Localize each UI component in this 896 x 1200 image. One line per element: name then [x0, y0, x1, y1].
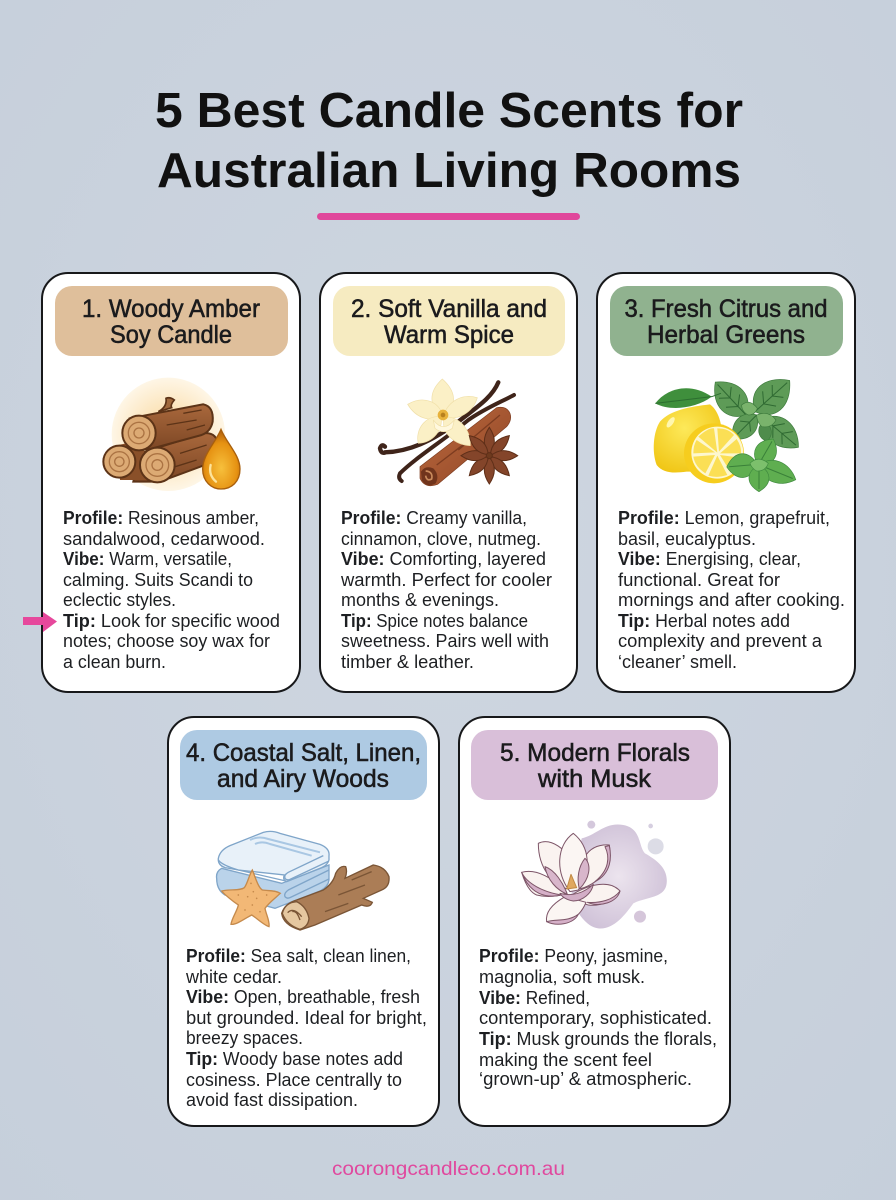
arrow: pointing at tip — [23, 612, 57, 632]
text: card 3 details: Vibe: Energising, clear, — [618, 548, 801, 569]
text: card 5 details: contemporary, sophisticated. — [479, 1007, 712, 1028]
text: card 2 details: Tip: Spice notes balance — [341, 610, 528, 631]
text: card 1 details: Tip: Look for specific wood — [63, 610, 280, 631]
heading: card 2: 2. Soft Vanilla and — [351, 295, 547, 323]
text: card 1 details: eclectic styles. — [63, 589, 176, 610]
heading: card 4: and Airy Woods — [217, 765, 389, 793]
text: card 4 details: Tip: Woody base notes add — [186, 1048, 403, 1069]
title — [155, 84, 743, 198]
text: card 4 details: cosiness. Place centrally to — [186, 1069, 402, 1090]
icon: vanilla, cinnamon and star anise — [380, 379, 518, 486]
text: card 2 details: warmth. Perfect for cooler — [340, 569, 552, 590]
text: card 5 details: Tip: Musk grounds the florals, — [479, 1028, 717, 1049]
heading: card 3: Herbal Greens — [647, 321, 805, 349]
text: card 2 details: sweetness. Pairs well with — [341, 630, 549, 651]
text: card 2 details: Profile: Creamy vanilla, — [341, 507, 527, 528]
heading: card 2: Warm Spice — [384, 321, 514, 349]
text: card 5 details: Vibe: Refined, — [479, 987, 590, 1008]
text: card 2 details: timber & leather. — [341, 651, 474, 672]
icon: logs and amber drop — [103, 378, 240, 491]
text: card 4 details: avoid fast dissipation. — [186, 1089, 358, 1110]
panel: woody amber soy candle — [42, 273, 300, 692]
icon: lemon and herbs — [654, 369, 807, 492]
heading: card 1: Soy Candle — [110, 321, 232, 349]
heading: card 5: with Musk — [537, 765, 652, 793]
text: card 3 details: Tip: Herbal notes add — [618, 610, 790, 631]
heading: card 3 — [610, 286, 843, 356]
text: card 1 details: calming. Suits Scandi to — [63, 569, 253, 590]
text: card 5 details: making the scent feel — [479, 1049, 652, 1070]
text: card 1 details: a clean burn. — [63, 651, 166, 672]
heading: card 4 — [180, 730, 427, 800]
text: card 2 details: Vibe: Comforting, layered — [341, 548, 546, 569]
panel: coastal salt, linen, and airy woods — [168, 717, 439, 1126]
footer: website: coorongcandleco.com.au — [332, 1158, 565, 1180]
text: card 3 details: functional. Great for — [618, 569, 780, 590]
text: card 5 details: magnolia, soft musk. — [479, 966, 645, 987]
title: Australian Living Rooms — [157, 144, 741, 198]
heading: card 5: 5. Modern Florals — [500, 739, 690, 767]
text: card 3 details — [618, 507, 845, 672]
text: card 4 details: but grounded. Ideal for bright, — [186, 1007, 427, 1028]
text: card 2 details: months & evenings. — [341, 589, 499, 610]
text: card 1 details: sandalwood, cedarwood. — [63, 528, 265, 549]
text: card 3 details: Profile: Lemon, grapefruit, — [618, 507, 830, 528]
text: card 1 details: Profile: Resinous amber, — [63, 507, 259, 528]
text: card 2 details: cinnamon, clove, nutmeg. — [341, 528, 541, 549]
panel: fresh citrus and herbal greens — [597, 273, 855, 692]
text: card 1 details — [63, 507, 280, 672]
icon: magnolia and musk cloud — [522, 821, 667, 928]
text: card 4 details: Vibe: Open, breathable, fresh — [186, 986, 420, 1007]
title underline — [317, 213, 580, 220]
text: card 5 details: ‘grown-up’ & atmospheric. — [479, 1068, 692, 1089]
text: card 4 details — [185, 945, 427, 1110]
heading: card 4: 4. Coastal Salt, Linen, — [186, 739, 421, 767]
text: card 1 details: Vibe: Warm, versatile, — [63, 548, 232, 569]
heading: card 1 — [55, 286, 288, 356]
heading: card 3: 3. Fresh Citrus and — [624, 295, 828, 323]
text: card 4 details: breezy spaces. — [186, 1027, 303, 1048]
heading: card 5 — [471, 730, 718, 800]
text: card 1 details: notes; choose soy wax for — [63, 630, 270, 651]
heading: card 2 — [333, 286, 565, 356]
text: card 2 details — [340, 507, 552, 672]
text: card 3 details: basil, eucalyptus. — [618, 528, 756, 549]
heading: card 1: 1. Woody Amber — [82, 295, 260, 323]
text: card 3 details: mornings and after cooking. — [618, 589, 845, 610]
text: card 5 details — [479, 945, 717, 1089]
text: card 3 details: ‘cleaner’ smell. — [618, 651, 737, 672]
panel: soft vanilla and warm spice — [320, 273, 577, 692]
text: card 5 details: Profile: Peony, jasmine, — [479, 945, 668, 966]
icon: towels, starfish and driftwood — [217, 831, 389, 930]
text: card 3 details: complexity and prevent a — [618, 630, 823, 651]
text: card 4 details: Profile: Sea salt, clean linen, — [186, 945, 411, 966]
text: card 4 details: white cedar. — [185, 966, 282, 987]
panel: modern florals with musk — [459, 717, 730, 1126]
title: 5 Best Candle Scents for — [155, 84, 743, 138]
